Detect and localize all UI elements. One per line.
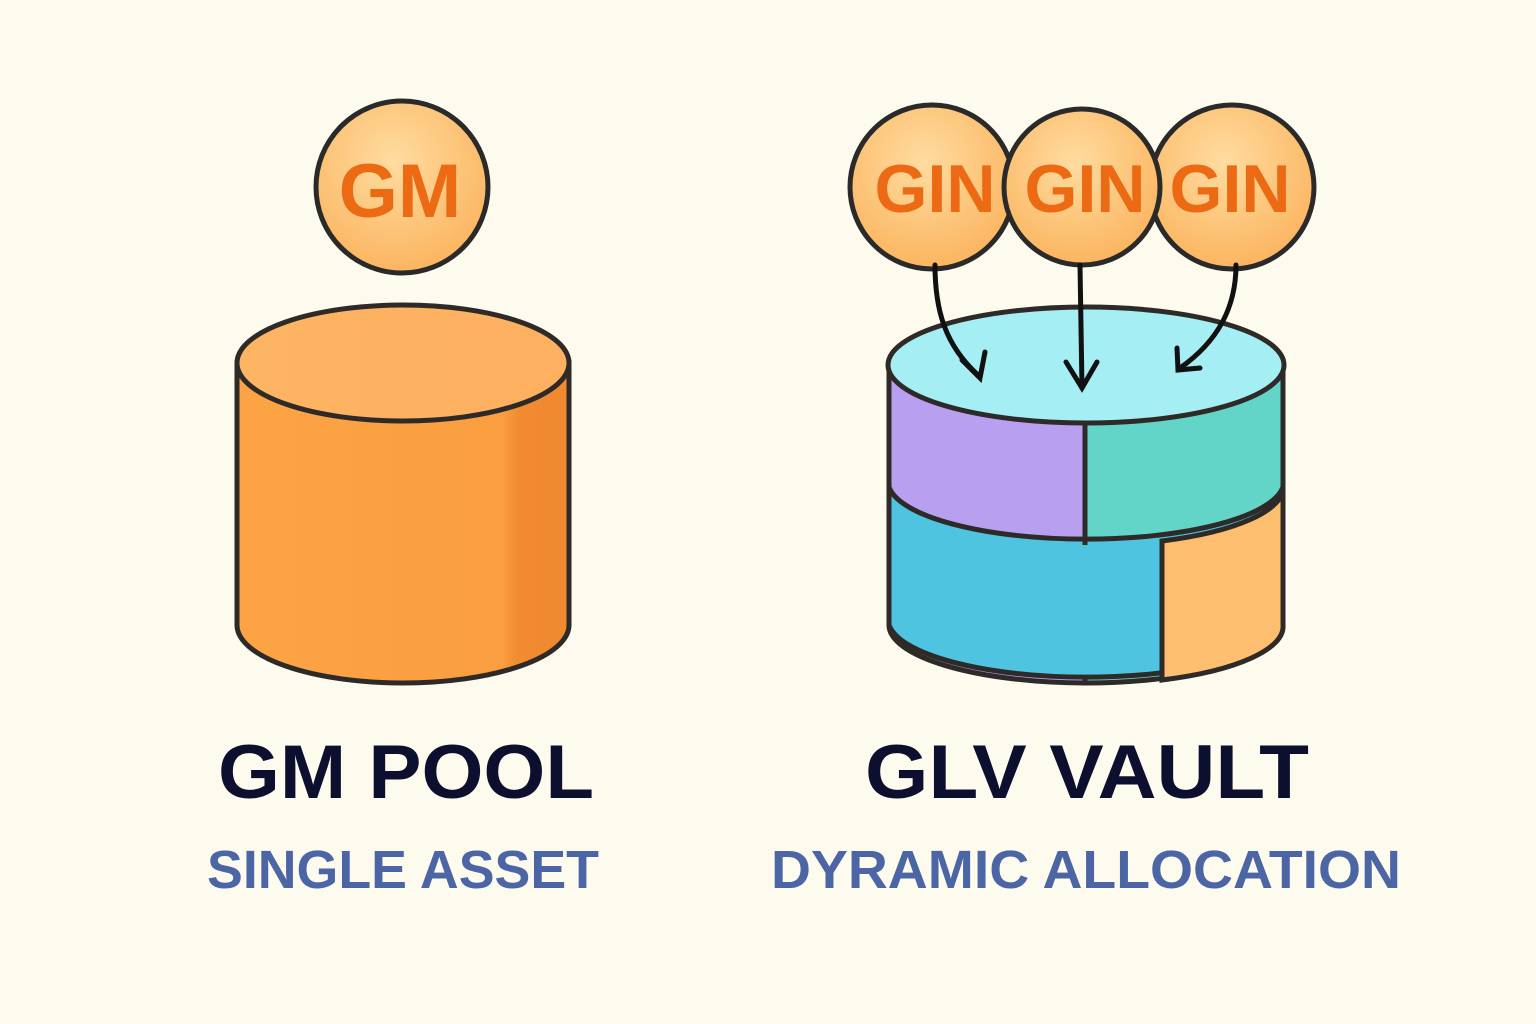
icon: GLV vault cylinder [888, 307, 1284, 683]
icon: GLV coins: GIN [1025, 151, 1145, 227]
icon: GLV coins [850, 105, 1314, 269]
icon: GLV coins: GIN [1170, 151, 1290, 227]
subtitle: SINGLE ASSET: SINGLE ASSET [207, 840, 599, 900]
title: GLV VAULT: GLV VAULT [865, 730, 1309, 815]
icon: GM pool cylinder [237, 305, 569, 683]
icon: GLV coins: GIN [875, 151, 995, 227]
icon: GM coin [316, 101, 488, 273]
subtitle: DYRAMIC ALLOCATION: DYRAMIC ALLOCATION [771, 840, 1401, 900]
arrows [935, 265, 1236, 388]
title: GM POOL: GM POOL [218, 730, 594, 815]
icon: GM coin: GM [339, 149, 461, 234]
